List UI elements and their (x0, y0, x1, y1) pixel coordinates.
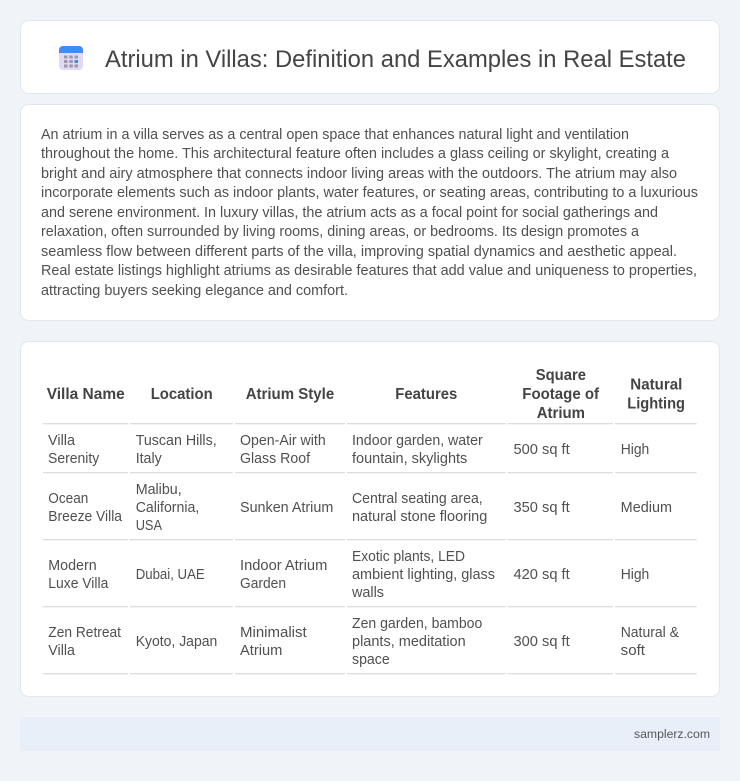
table row: Ocean Breeze Villa: 350 sq ft (514, 500, 570, 516)
table row: Ocean Breeze Villa: Malibu, (136, 482, 182, 498)
table row: Zen Retreat Villa: Atrium (240, 643, 282, 659)
table row: Modern Luxe Villa: Garden (240, 576, 286, 592)
table row: Villa Serenity: Indoor garden, water (352, 433, 483, 449)
table row: Modern Luxe Villa: 420 sq ft (514, 567, 570, 583)
table row: Villa Serenity: Tuscan Hills, (136, 433, 217, 449)
table header row (47, 367, 685, 422)
table row: Zen Retreat Villa: Zen Retreat (48, 625, 121, 641)
title: Atrium in Villas: Definition and Examples in Real Estate (105, 46, 686, 73)
table row: Villa Serenity: 500 sq ft (514, 442, 570, 458)
table row: Ocean Breeze Villa: USA (136, 518, 162, 534)
text block: atrium description: Real estate listings highlight atriums as desirable features that add value and uniqueness to properties, (41, 263, 697, 279)
table row: Ocean Breeze Villa: Central seating area, (352, 491, 483, 507)
table row: Villa Serenity: Open-Air with (240, 433, 326, 449)
table row: Ocean Breeze Villa: natural stone flooring (352, 509, 487, 525)
text block: atrium description: seamless flow between different parts of the villa, improving spatial dynamics and aesthetic appeal. (41, 244, 677, 260)
text block: atrium description: incorporate elements such as indoor plants, water features, or seating areas, contributing to a luxurious (41, 185, 698, 201)
text block: atrium description: throughout the home. This architectural feature often includes a glass ceiling or skylight, creating a (41, 146, 669, 162)
text block: atrium description: attracting buyers seeking elegance and comfort. (41, 283, 348, 299)
text block: atrium description: An atrium in a villa serves as a central open space that enhances natural light and ventilation (41, 127, 629, 143)
table row: Villa Serenity: High (621, 442, 649, 458)
table row: Villa Serenity: Villa (48, 433, 75, 449)
table row: Modern Luxe Villa: Indoor Atrium (240, 558, 327, 574)
footer bar (20, 717, 720, 751)
table row: Zen Retreat Villa: plants, meditation (352, 634, 466, 650)
table row: Villa Serenity (48, 433, 649, 467)
table row: Zen Retreat Villa: space (352, 652, 390, 668)
table header row: Atrium Style (246, 386, 334, 403)
text block: atrium description: and serene environment. In luxury villas, the atrium acts as a focal point for social gatherings and (41, 205, 658, 221)
table row: Ocean Breeze Villa: Medium (621, 500, 672, 516)
table row: Modern Luxe Villa: ambient lighting, glass (352, 567, 495, 583)
table row: Zen Retreat Villa: 300 sq ft (514, 634, 570, 650)
table row: Ocean Breeze Villa: Breeze Villa (48, 509, 122, 525)
table row: Villa Serenity: Glass Roof (240, 451, 310, 467)
table row: Modern Luxe Villa: Luxe Villa (48, 576, 108, 592)
table header row: Footage of (522, 386, 600, 403)
table row: Zen Retreat Villa: Natural & (621, 625, 679, 641)
panel: villa comparison table (20, 342, 720, 696)
table row: Zen Retreat Villa: Villa (48, 643, 75, 659)
table row: Ocean Breeze Villa: Sunken Atrium (240, 500, 333, 516)
table row: Modern Luxe Villa: Exotic plants, LED (352, 549, 465, 565)
table header row: Features (395, 386, 457, 403)
table header row: Location (151, 386, 213, 403)
table row: Modern Luxe Villa: walls (351, 585, 384, 601)
table row: Villa Serenity: fountain, skylights (352, 451, 467, 467)
table header row: Square (536, 367, 586, 384)
table header row: Natural (630, 376, 682, 393)
icon: calendar (59, 46, 83, 70)
text block: atrium description: relaxation, often surrounded by living rooms, dining areas, or bedrooms. Its design promotes a (41, 224, 639, 240)
table row: Modern Luxe Villa: High (621, 567, 649, 583)
panel: title header (20, 20, 720, 94)
table header row: Atrium (537, 405, 585, 422)
table row: Ocean Breeze Villa: California, (136, 500, 199, 516)
table row: Zen Retreat Villa (48, 616, 679, 668)
table header row: Lighting (627, 395, 685, 412)
table row: Zen Retreat Villa: Kyoto, Japan (136, 634, 217, 650)
table row: Villa Serenity: Italy (136, 451, 163, 467)
table row: Zen Retreat Villa: Minimalist (240, 625, 307, 641)
table row: Modern Luxe Villa: Dubai, UAE (136, 567, 205, 583)
table row: Zen Retreat Villa: Zen garden, bamboo (352, 616, 482, 632)
table row: Ocean Breeze Villa (48, 482, 672, 534)
text block: atrium description: bright and airy atmosphere that connects indoor living areas with the outdoors. The atrium may also (41, 166, 677, 182)
table header row: Villa Name (47, 386, 125, 403)
footer source text: samplerz.com (634, 727, 710, 741)
text block: atrium description (41, 127, 698, 299)
table row: Zen Retreat Villa: soft (621, 643, 645, 659)
table row: Villa Serenity: Serenity (48, 451, 100, 467)
panel: description (20, 104, 720, 320)
table row: Modern Luxe Villa (48, 549, 649, 601)
table row: Ocean Breeze Villa: Ocean (48, 491, 88, 507)
table row: Modern Luxe Villa: Modern (48, 558, 97, 574)
